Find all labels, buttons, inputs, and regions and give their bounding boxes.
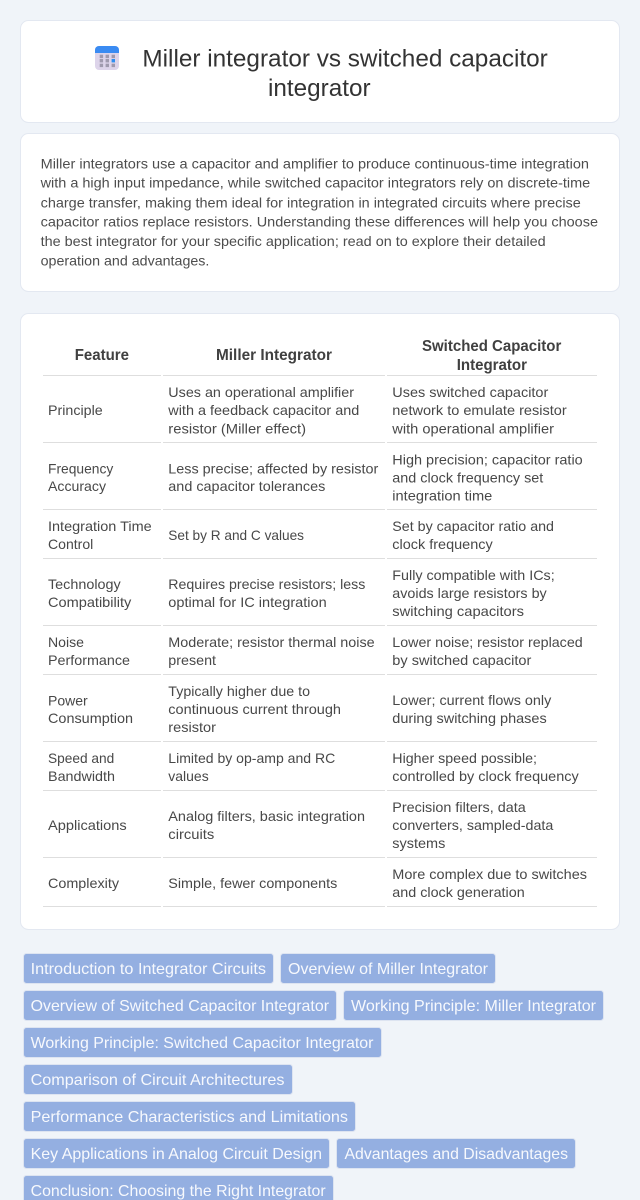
row: speed and bandwidth: Higher speed possible;: [392, 750, 537, 766]
intro text: operation and advantages.: [41, 252, 209, 268]
row: applications: Analog filters, basic integration: [168, 808, 365, 824]
row: integration time control: Control: [48, 536, 93, 552]
row: noise performance: Moderate; resistor thermal noise: [168, 634, 375, 650]
table header: Integrator: [457, 357, 527, 374]
tag: key applications: Key Applications in Analog Circuit Design: [31, 1146, 322, 1163]
row: principle: network to emulate resistor: [392, 402, 567, 418]
tag: conclusion: [24, 1176, 334, 1200]
row: applications: systems: [392, 835, 445, 851]
row: power consumption: Power: [48, 692, 88, 708]
intro text: with a high input impedance, while switched capacitor integrators rely on discrete-time: [40, 175, 590, 191]
row: noise performance: by switched capacitor: [392, 652, 532, 668]
row: integration time control: clock frequency: [392, 536, 493, 552]
row: power consumption: [48, 683, 551, 735]
row: technology compatibility: Fully compatible with ICs;: [392, 567, 555, 583]
tag: key applications: [24, 1138, 330, 1168]
row: frequency accuracy: [48, 451, 583, 503]
tag: advantages: [336, 1138, 576, 1168]
row: principle: Uses switched capacitor: [392, 384, 549, 400]
tag: overview miller: [280, 954, 496, 984]
row: speed and bandwidth: Limited by op-amp and RC: [168, 750, 335, 766]
intro text: capacitor ratios replace resistors. Understanding these differences will help you choose: [41, 214, 598, 230]
row: noise performance: Performance: [48, 652, 130, 668]
row: power consumption: Lower; current flows only: [392, 692, 551, 708]
row: technology compatibility: Requires precise resistors; less: [168, 576, 365, 592]
row: integration time control: Set by R and C values: [168, 527, 304, 543]
tag: working principle switched capacitor: [24, 1028, 382, 1058]
table header: Miller Integrator: [216, 347, 332, 364]
intro text: Miller integrators use a capacitor and amplifier to produce continuous-time integration: [41, 155, 589, 171]
row: complexity: Simple, fewer components: [168, 875, 337, 891]
row: integration time control: Set by capacitor ratio and: [392, 518, 554, 534]
tag: introduction: [24, 954, 274, 984]
row: frequency accuracy: and capacitor tolerances: [168, 478, 325, 494]
intro text: charge transfer, making them ideal for integration in integrated circuits where precise: [41, 194, 581, 210]
row: power consumption: Typically higher due to: [168, 683, 310, 699]
row: speed and bandwidth: controlled by clock frequency: [392, 768, 579, 784]
row: principle: with a feedback capacitor and: [167, 402, 359, 418]
row: applications: [48, 799, 554, 851]
tag: conclusion: Conclusion: Choosing the Right Integrator: [31, 1183, 326, 1200]
row: technology compatibility: optimal for IC integration: [168, 594, 327, 610]
row: speed and bandwidth: Speed and: [48, 750, 114, 766]
row: technology compatibility: switching capacitors: [392, 603, 524, 619]
tag: working principle miller: [344, 990, 604, 1020]
icon: calendar: [95, 46, 119, 70]
panel: introduction: [20, 134, 620, 292]
row: principle: [48, 384, 567, 436]
tag: working principle miller: Working Principle: Miller Integrator: [351, 998, 597, 1015]
row: speed and bandwidth: values: [168, 768, 209, 784]
row: power consumption: during switching phases: [392, 710, 547, 726]
intro text: the best integrator for your specific application; read on to explore their detailed: [41, 233, 546, 249]
row: power consumption: resistor: [168, 719, 216, 735]
header panel: [20, 20, 620, 122]
row: technology compatibility: [48, 567, 555, 619]
tag: introduction: Introduction to Integrator Circuits: [31, 961, 266, 978]
row: technology compatibility: Technology: [48, 576, 121, 592]
row: noise performance: Noise: [48, 634, 84, 650]
row: noise performance: present: [168, 652, 216, 668]
row: applications: Precision filters, data: [392, 799, 526, 815]
row: applications: converters, sampled-data: [392, 817, 554, 833]
row: integration time control: [48, 518, 554, 552]
tag: overview switched capacitor: Overview of Switched Capacitor Integrator: [31, 998, 330, 1015]
title: integrator: [268, 75, 371, 102]
row: technology compatibility: avoids large resistors by: [392, 585, 547, 601]
row: frequency accuracy: High precision; capacitor ratio: [392, 451, 583, 467]
table header: [75, 338, 561, 374]
row: frequency accuracy: integration time: [392, 487, 493, 503]
row: complexity: More complex due to switches: [392, 866, 587, 882]
row: frequency accuracy: Accuracy: [48, 478, 106, 494]
row: technology compatibility: Compatibility: [48, 594, 131, 610]
row: frequency accuracy: and clock frequency set: [392, 469, 543, 485]
row: frequency accuracy: Less precise; affected by resistor: [168, 460, 379, 476]
row: frequency accuracy: Frequency: [48, 460, 113, 476]
title: [142, 46, 548, 102]
row: complexity: and clock generation: [392, 884, 525, 900]
row: principle: with operational amplifier: [391, 420, 554, 436]
tag: performance: [24, 1102, 356, 1132]
row: noise performance: Lower noise; resistor replaced: [392, 634, 583, 650]
row: applications: Applications: [48, 817, 127, 833]
row: power consumption: continuous current through: [168, 701, 341, 717]
row: speed and bandwidth: [48, 750, 579, 784]
row: noise performance: [48, 634, 583, 668]
row: principle: resistor (Miller effect): [168, 420, 306, 436]
row: integration time control: Integration Time: [48, 518, 152, 534]
title: Miller integrator vs switched capacitor: [142, 46, 548, 73]
row: speed and bandwidth: Bandwidth: [48, 768, 115, 784]
tag: working principle switched capacitor: Working Principle: Switched Capacitor Integrator: [31, 1035, 374, 1052]
row: principle: Principle: [48, 402, 103, 418]
tag: comparison: [24, 1064, 292, 1094]
tag: performance: Performance Characteristics and Limitations: [31, 1109, 348, 1126]
tag: advantages: Advantages and Disadvantages: [344, 1146, 568, 1163]
row: power consumption: Consumption: [48, 710, 133, 726]
row: applications: circuits: [168, 826, 214, 842]
panel: comparison table: [20, 314, 620, 930]
table header: Switched Capacitor: [422, 338, 561, 355]
row: complexity: Complexity: [48, 875, 119, 891]
tag: overview switched capacitor: [24, 990, 336, 1020]
row: complexity: [48, 866, 587, 900]
tag: overview miller: Overview of Miller Integrator: [288, 961, 489, 978]
topic tags: [24, 954, 604, 1200]
tag: comparison: Comparison of Circuit Architectures: [31, 1072, 284, 1089]
row: principle: Uses an operational amplifier: [168, 384, 354, 400]
table header: Feature: [75, 347, 129, 364]
intro text: [40, 155, 598, 268]
